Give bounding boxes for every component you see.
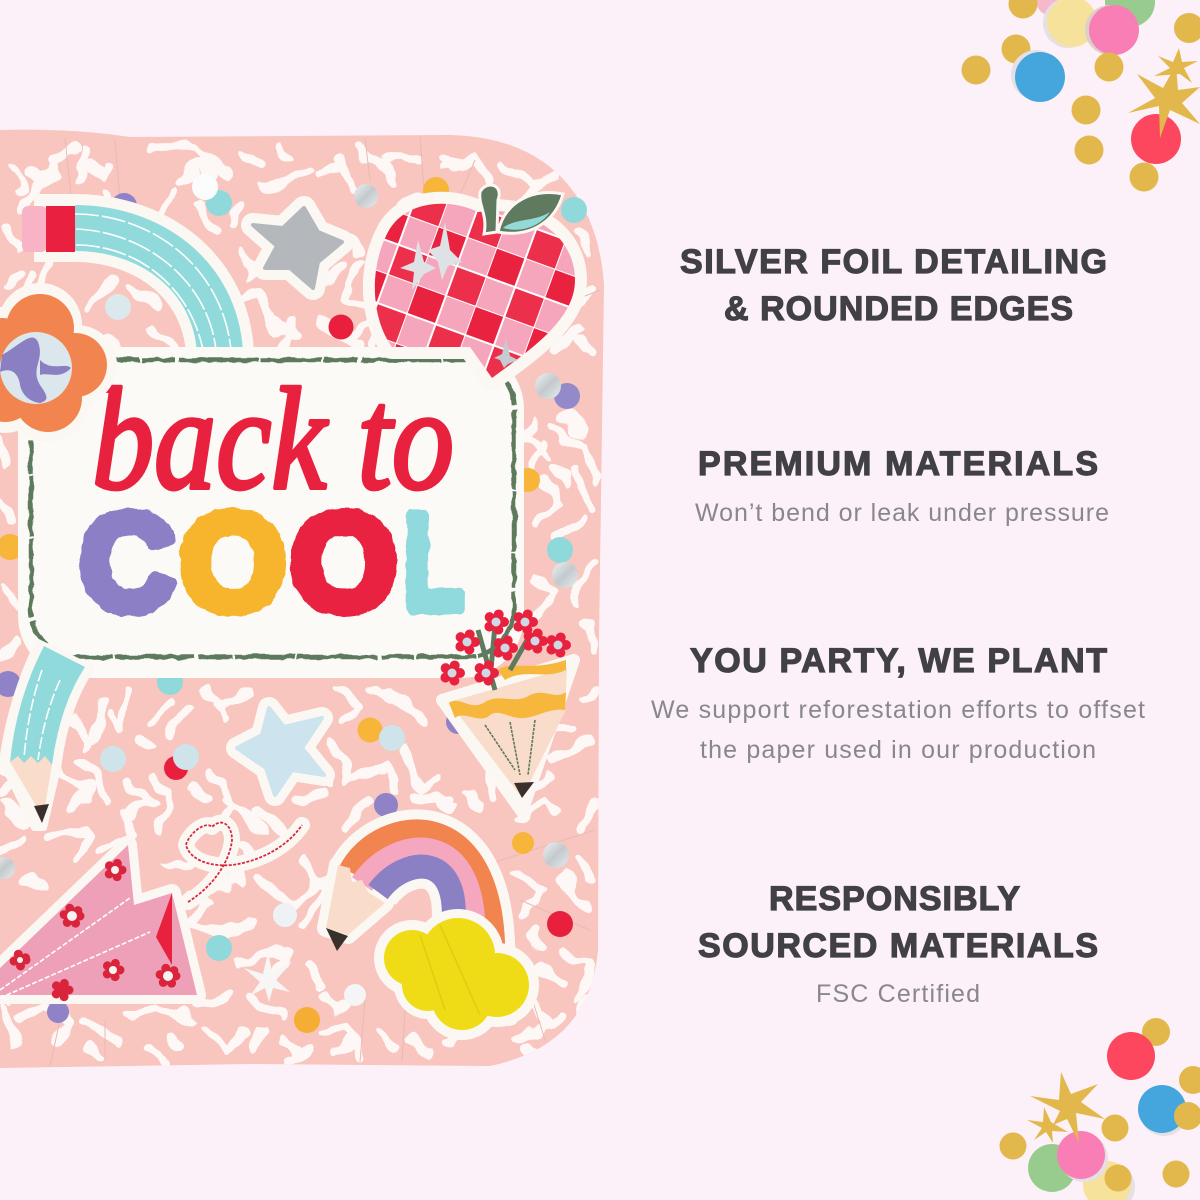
icon: sparkle: [244, 952, 292, 1002]
text block: you party we plant: [651, 642, 1145, 764]
title: cool: O: [180, 486, 286, 638]
title: cool: [80, 486, 463, 638]
yellow cloud: [374, 909, 539, 1040]
text block: responsibly sourced materials: [698, 880, 1098, 1008]
text block: premium materials: PREMIUM MATERIALS: [698, 445, 1098, 483]
apple stem: [480, 185, 499, 234]
text block: silver foil detailing: & ROUNDED EDGES: [724, 290, 1073, 328]
plate base: [0, 130, 604, 1068]
icon: paper airplane: [0, 845, 197, 998]
icon: blue pencil bottom left: [2, 642, 92, 828]
icon: heart doodle: [186, 823, 302, 902]
text block: you party we plant: We support reforestation efforts to offset: [651, 696, 1145, 724]
icon: pencil bouquet: [442, 614, 574, 812]
confetti: top right: [962, 0, 1200, 192]
icon: rainbow pencil top left: [22, 206, 231, 352]
title: cool: C: [80, 486, 175, 638]
text block: silver foil detailing: SILVER FOIL DETAILING: [680, 243, 1107, 281]
white terrazzo speckle pattern: [0, 145, 595, 1060]
panel: back to cool label: [18, 347, 524, 678]
text block: premium materials: [695, 445, 1109, 527]
title: cool: O: [291, 486, 397, 638]
text block: silver foil detailing: [680, 243, 1107, 328]
icon: orange flower with globe: [0, 283, 117, 442]
text block: responsibly sourced materials: FSC Certified: [816, 980, 980, 1008]
text block: you party we plant: the paper used in our production: [700, 736, 1096, 764]
title: back to: back to: [92, 358, 454, 520]
text block: responsibly sourced materials: SOURCED MATERIALS: [698, 927, 1098, 965]
confetti dots printed on plate: [0, 174, 587, 1033]
green hand drawn border: [31, 360, 514, 657]
text block: responsibly sourced materials: RESPONSIBLY: [769, 880, 1020, 918]
confetti: bottom right: [1000, 1018, 1200, 1200]
text block: you party we plant: YOU PARTY, WE PLANT: [690, 642, 1107, 680]
icon: disco apple: [375, 185, 575, 378]
icon: light blue star: [237, 708, 324, 795]
label background: [18, 347, 524, 678]
text block: premium materials: Won’t bend or leak under pressure: [695, 499, 1109, 527]
icon: silver star: [253, 208, 342, 288]
bouquet flowers: [444, 614, 566, 681]
airplane flowers: [14, 863, 176, 997]
title: cool: L: [404, 486, 463, 638]
plate crease lines: [50, 137, 600, 1066]
apple sparkles: [400, 222, 462, 290]
apple leaf: [498, 193, 563, 233]
icon: rainbow pencil with cloud: [326, 831, 539, 1040]
panel: paper plate: [0, 130, 604, 1068]
